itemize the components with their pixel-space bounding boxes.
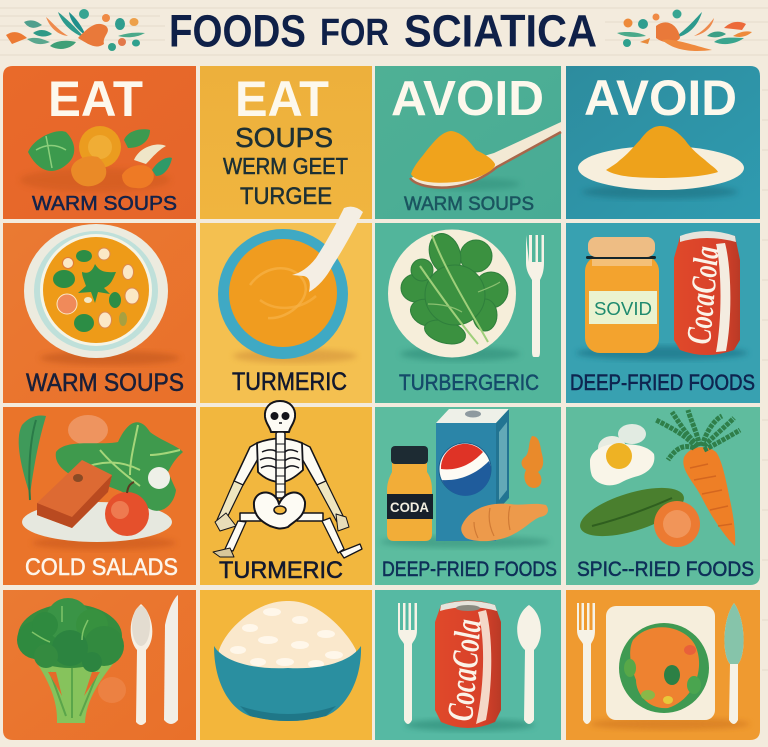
panel: spinach plate: [375, 223, 561, 403]
panel: avoid warm soups: AVOID: [391, 72, 544, 126]
icon: plate with salad: [606, 606, 715, 720]
icon: spoon and knife: [131, 595, 178, 725]
panel: cola can and cutlery: [375, 590, 561, 740]
panel: broccoli: [3, 590, 196, 740]
icon: seated skeleton: [213, 401, 362, 558]
icon: spoon: [517, 605, 541, 724]
icon: honey jar: SOVID: [594, 299, 652, 319]
panel: eat warm soups: [3, 66, 196, 219]
title: FOR: [320, 12, 389, 54]
panel: rice bowl: [200, 590, 372, 740]
icon: fork: [398, 603, 417, 724]
panel: eat soups: WERM GEET: [223, 153, 348, 179]
panel: avoid turmeric plate: [566, 66, 760, 219]
icon: cola can: [435, 600, 501, 728]
icon: spoon of turmeric: [410, 122, 561, 190]
panel: soda bottle and box: [375, 407, 561, 585]
panel: spinach plate: TURBERGERIC: [399, 370, 539, 395]
panel: eat soups: SOUPS: [235, 122, 333, 153]
icon: fork: [577, 603, 595, 724]
panel: skeleton: TURMERIC: [219, 557, 343, 584]
title: FOODS: [169, 6, 306, 56]
icon: mixed vegetables: [20, 126, 172, 192]
icon: cola can: CocaCola: [679, 245, 727, 346]
icon: cola can: CocaCola: [440, 618, 490, 723]
icon: fried egg and cauliflower: [590, 424, 654, 485]
panel: eat warm soups: EAT: [48, 71, 143, 127]
panel: eat soups: EAT: [235, 71, 329, 127]
icon: cucumber: [575, 478, 689, 546]
panel: avoid turmeric plate: AVOID: [584, 70, 737, 126]
icon: right floral decoration: [617, 10, 752, 51]
icon: honey jar: [585, 237, 659, 353]
panel: avoid warm soups: WARM SOUPS: [404, 194, 534, 215]
panel: vegetables and egg: [566, 407, 760, 585]
icon: plate of turmeric: [578, 126, 744, 199]
icon: spinach on plate: [388, 229, 520, 361]
panel: soda bottle and box: DEEP-FRIED FOODS: [382, 557, 557, 581]
panel: eat soups: TURGEE: [240, 183, 332, 210]
icon: turmeric bowl with spoon: [218, 207, 363, 363]
panel: turmeric bowl: TURMERIC: [232, 368, 347, 396]
panel: warm soups bowl: [3, 223, 196, 403]
panel: cold salads: COLD SALADS: [25, 554, 178, 581]
icon: soup bowl with herbs: [24, 224, 180, 365]
icon: blue box with logo: [436, 409, 509, 541]
icon: fork: [526, 235, 544, 357]
panel: eat soups: [200, 66, 372, 219]
panel: skeleton: [200, 401, 372, 585]
title: [169, 6, 597, 56]
title: SCIATICA: [404, 6, 597, 56]
icon: turmeric roots: [461, 436, 548, 541]
panel: warm soups bowl: WARM SOUPS: [26, 369, 184, 397]
icon: cola can: [674, 231, 740, 355]
icon: mint spoon: [724, 603, 744, 724]
icon: salad plate: [19, 415, 183, 550]
panel: avoid warm soups: [375, 66, 561, 219]
icon: rice bowl: [214, 601, 361, 721]
panel: salad plate setting: [566, 590, 760, 740]
icon: soda bottle: [387, 446, 433, 541]
panel: eat warm soups: WARM SOUPS: [32, 192, 177, 215]
panel: jar and cola: [566, 223, 760, 403]
panel: cold salads: [3, 407, 196, 585]
panel: turmeric bowl: [200, 207, 372, 403]
icon: orange slice: [654, 501, 700, 547]
icon: carrot: [656, 410, 740, 546]
icon: broccoli: [17, 598, 124, 723]
icon: soda bottle: CODA: [390, 499, 429, 515]
icon: left floral decoration: [6, 9, 145, 51]
